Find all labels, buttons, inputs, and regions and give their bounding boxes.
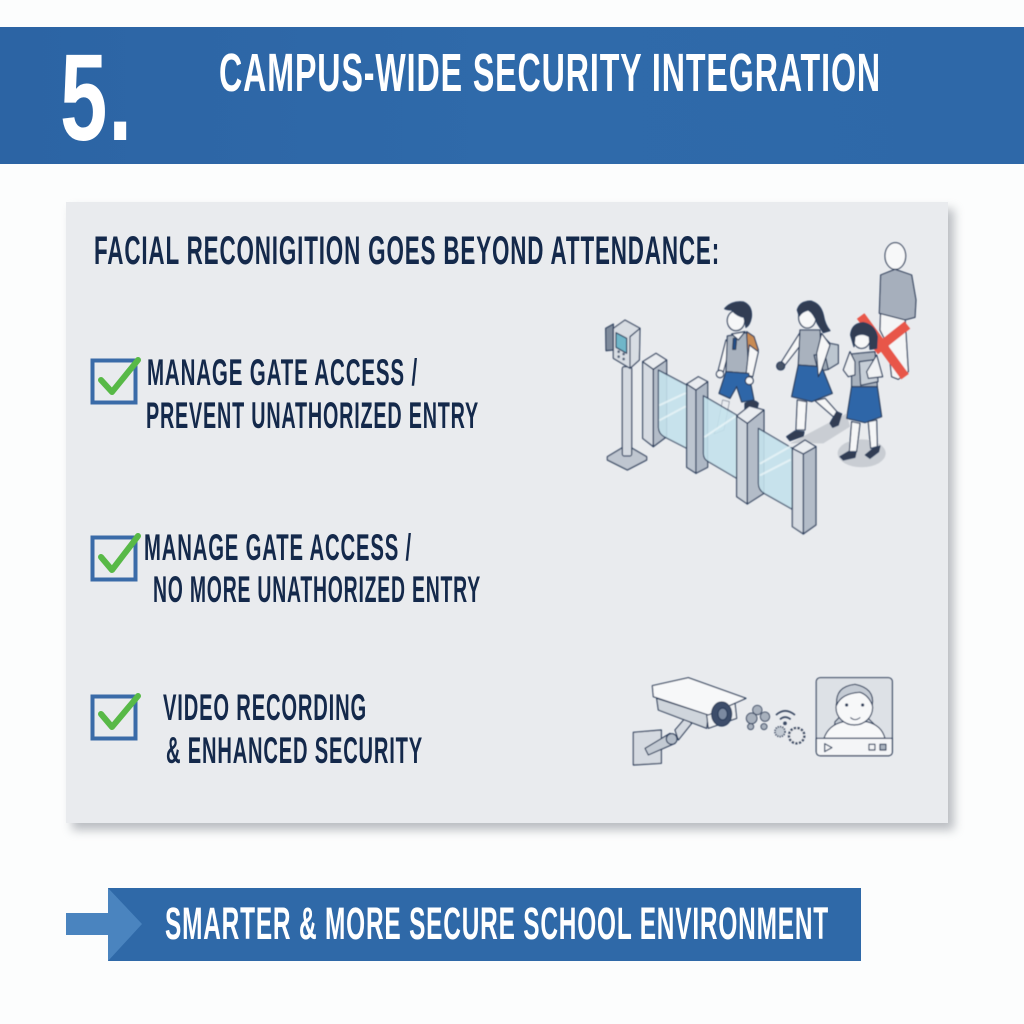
item text one	[146, 352, 479, 436]
item text one: MANAGE GATE ACCESS /	[147, 352, 418, 393]
item text one: PREVENT UNATHORIZED ENTRY	[146, 395, 479, 436]
item text three: & ENHANCED SECURITY	[166, 730, 423, 771]
item: gate access, no more entry	[92, 527, 481, 610]
arrow	[66, 888, 142, 961]
floor shadows	[790, 413, 886, 467]
student: girl at front	[840, 323, 883, 460]
item: video recording	[92, 687, 423, 771]
item text three: VIDEO RECORDING	[163, 687, 367, 728]
item text two: MANAGE GATE ACCESS /	[144, 527, 412, 568]
network nodes and gears	[746, 705, 804, 743]
header band	[0, 27, 1024, 167]
icon: checkbox two	[92, 536, 138, 580]
bottom banner	[66, 888, 861, 961]
illustration: students passing security gates	[606, 243, 916, 534]
item: gate access, prevent entry	[92, 352, 479, 436]
video feed card	[816, 678, 892, 756]
item text two	[144, 527, 481, 610]
kiosk reader	[606, 320, 647, 470]
adult blocked	[879, 243, 916, 379]
security camera	[633, 678, 746, 765]
item text two: NO MORE UNATHORIZED ENTRY	[153, 569, 481, 610]
illustration: camera, network and video feed	[633, 678, 892, 765]
red cross	[861, 316, 907, 377]
item text three	[163, 687, 423, 771]
student: girl in middle	[777, 301, 842, 441]
panel: features	[66, 202, 954, 830]
section number: 5.	[60, 30, 133, 167]
student: boy	[714, 302, 758, 434]
pillars and glass gates	[643, 353, 816, 534]
icon: checkbox one	[92, 360, 138, 402]
icon: checkbox three	[92, 696, 138, 738]
